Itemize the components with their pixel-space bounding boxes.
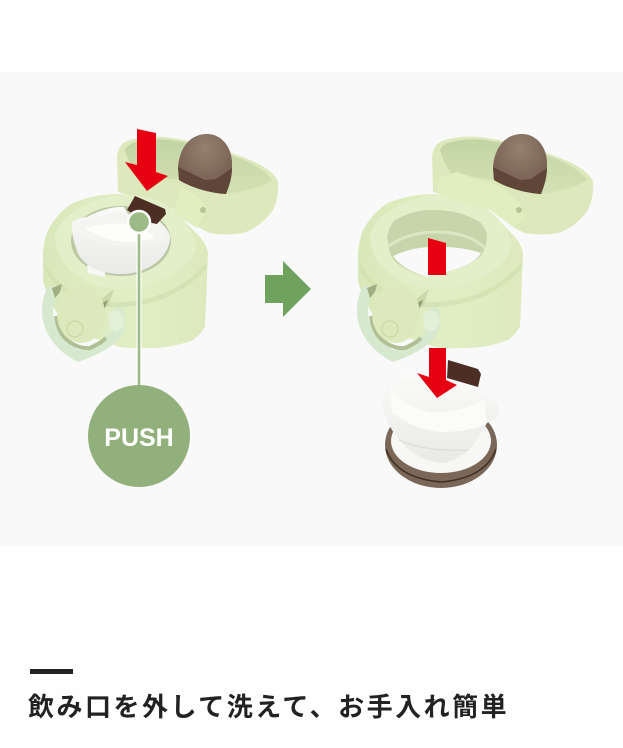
red shaft through ring <box>428 238 446 275</box>
right product: cap with mouthpiece removed <box>358 134 593 488</box>
left product: cap with open lid <box>43 129 278 356</box>
hinge <box>435 172 525 227</box>
cap body <box>43 194 208 348</box>
PUSH badge <box>88 385 190 487</box>
red push arrow <box>125 129 168 191</box>
cap body <box>358 194 523 348</box>
white mouthpiece removed <box>383 375 498 463</box>
lid with brown stopper <box>117 134 278 234</box>
title: 飲み口を外して洗えて、お手入れ簡単 <box>28 692 509 722</box>
lid with brown stopper <box>432 134 593 234</box>
brown tab removed <box>447 360 481 387</box>
brown push tab <box>127 196 166 224</box>
red arrow down <box>417 348 457 398</box>
panel background <box>0 72 623 545</box>
ring opening <box>387 210 487 277</box>
PUSH badge: PUSH <box>104 424 174 452</box>
hinge <box>174 186 206 228</box>
push leader line <box>128 211 150 392</box>
recess around mouthpiece <box>71 206 171 276</box>
strap and disk <box>362 284 439 356</box>
heading rule <box>30 669 73 674</box>
strap and disk <box>48 284 124 356</box>
white mouthpiece <box>72 207 170 277</box>
center green arrow <box>265 261 311 317</box>
brown gasket ring <box>385 402 497 488</box>
